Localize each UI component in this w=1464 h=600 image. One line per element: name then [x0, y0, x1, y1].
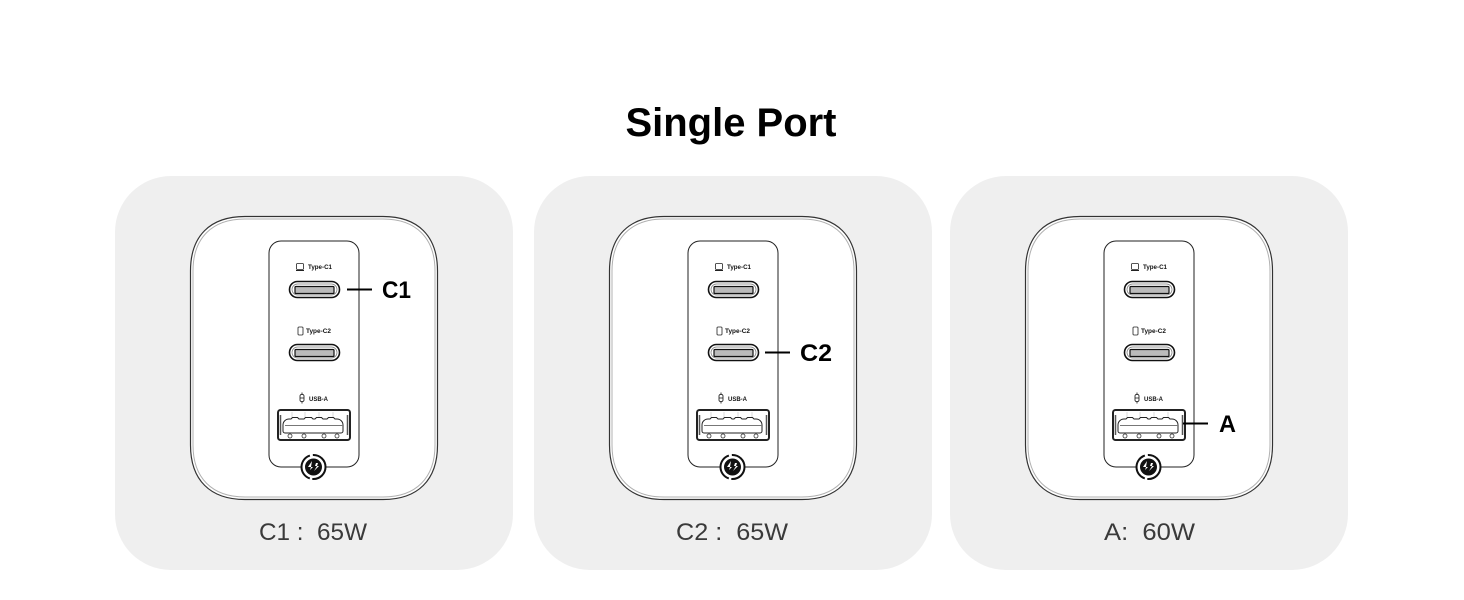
charger: C1 [190, 216, 438, 500]
panel: C2 single port [534, 176, 932, 570]
callout: C1 [347, 277, 411, 304]
caption: A 60W: A: 60W [1104, 519, 1195, 546]
panel: C1 single port [115, 176, 513, 570]
callout: C2 [765, 340, 832, 367]
charger: C2: Type-C1 [727, 264, 751, 271]
charger: C2 [610, 216, 856, 500]
caption: C1 65W: C1 : 65W [259, 519, 367, 546]
title: Single Port [626, 101, 836, 145]
charger: C2: USB-A [728, 396, 747, 403]
caption: C2 65W: C2 : 65W [676, 519, 788, 546]
charger: A: Type-C1 [1143, 264, 1167, 271]
charger: C1: Type-C2 [306, 328, 331, 335]
panel: A single port [950, 176, 1348, 570]
charger: C1: Type-C1 [308, 264, 332, 271]
callout: C1: C1 [382, 277, 411, 304]
callout: A [1183, 411, 1236, 438]
charger: A: USB-A [1144, 396, 1163, 403]
charger: C1: USB-A [309, 396, 328, 403]
charger: A [1026, 216, 1272, 500]
callout: C2: C2 [800, 340, 832, 367]
charger: A: Type-C2 [1141, 328, 1166, 335]
callout: A: A [1219, 411, 1236, 438]
charger: C2: Type-C2 [725, 328, 750, 335]
